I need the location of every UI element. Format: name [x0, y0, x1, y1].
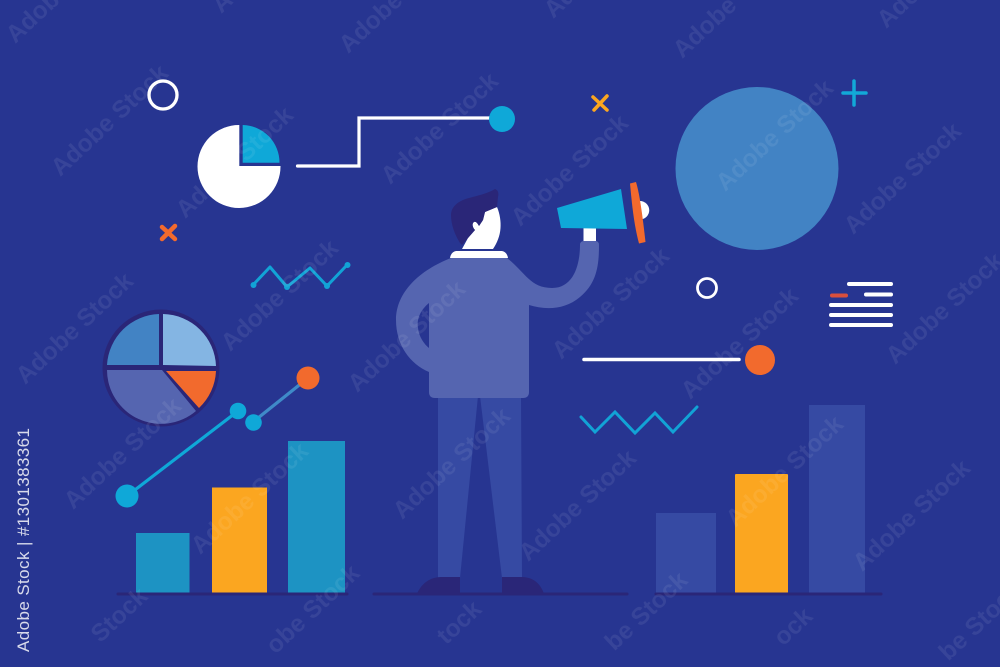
face: [462, 207, 501, 249]
stock watermark pattern: Adobe Stock: [59, 392, 187, 514]
pie chart: white with cyan quarter: [198, 125, 281, 208]
icon: orange cross: [162, 226, 175, 239]
icon: yellow cross: [593, 96, 607, 110]
megaphone rim: [630, 182, 646, 244]
stock watermark pattern: Adobe Stock: [216, 234, 344, 356]
megaphone cone: [557, 189, 627, 229]
bar chart right: [656, 405, 881, 594]
zigzag line lower right: [581, 407, 697, 433]
legs: [438, 396, 522, 578]
stock watermark pattern: Adobe Stock: [547, 242, 675, 364]
ground line under person: [374, 592, 627, 596]
stock watermark pattern: be Stock: [600, 566, 693, 656]
megaphone handle: [584, 228, 596, 241]
stock watermark pattern: Adobe Stock: [506, 109, 634, 231]
connector line to cyan dot: [298, 106, 515, 166]
bar chart left: [118, 441, 347, 594]
stock watermark pattern: Adobe Stock: [376, 67, 504, 189]
stock watermark pattern: Adobe Stock: [514, 444, 642, 566]
stock watermark pattern: Adobe Stock: [46, 59, 174, 181]
hair: [451, 189, 498, 245]
stock watermark pattern: Adobe Stock: [848, 454, 976, 576]
stock watermark pattern: Adobe Stock: [11, 267, 139, 389]
stock watermark pattern: Adobe Stock: [676, 282, 804, 404]
stock watermark pattern: Adobe Stock: [711, 74, 839, 196]
stock watermark pattern: Stock: [86, 582, 153, 648]
stock watermark pattern: Adobe Stock: [721, 410, 849, 532]
small ring: [698, 278, 716, 298]
collar: [450, 251, 508, 258]
stock watermark pattern: Adobe Stock: [839, 117, 967, 239]
stock id side label: Adobe Stock | #1301383361: [14, 428, 33, 652]
person with megaphone: [374, 182, 649, 594]
top-left ring: [149, 81, 177, 109]
stock watermark pattern: Adobe Stock: [388, 402, 516, 524]
stock watermark pattern: Adobe Stock: [186, 437, 314, 559]
big blue circle: [676, 87, 838, 250]
stock watermark pattern: Adobe Stock: [171, 101, 299, 223]
trend line with dots: [116, 366, 320, 508]
stock watermark pattern: ock: [769, 602, 818, 651]
shoes: [417, 577, 544, 594]
horizontal line with orange dot: [584, 345, 775, 375]
megaphone back dome: [637, 201, 649, 220]
icon: cyan plus: [843, 81, 866, 105]
stock watermark pattern: obe Stock: [261, 559, 365, 659]
text-list lines icon: [831, 284, 891, 325]
pie chart: four segments: [102, 310, 220, 426]
zigzag line upper left: [250, 262, 350, 290]
stock watermark pattern: Adobe Stock: [343, 275, 471, 397]
sweater body and arms: [396, 241, 599, 398]
stock watermark pattern: tock: [432, 595, 487, 650]
